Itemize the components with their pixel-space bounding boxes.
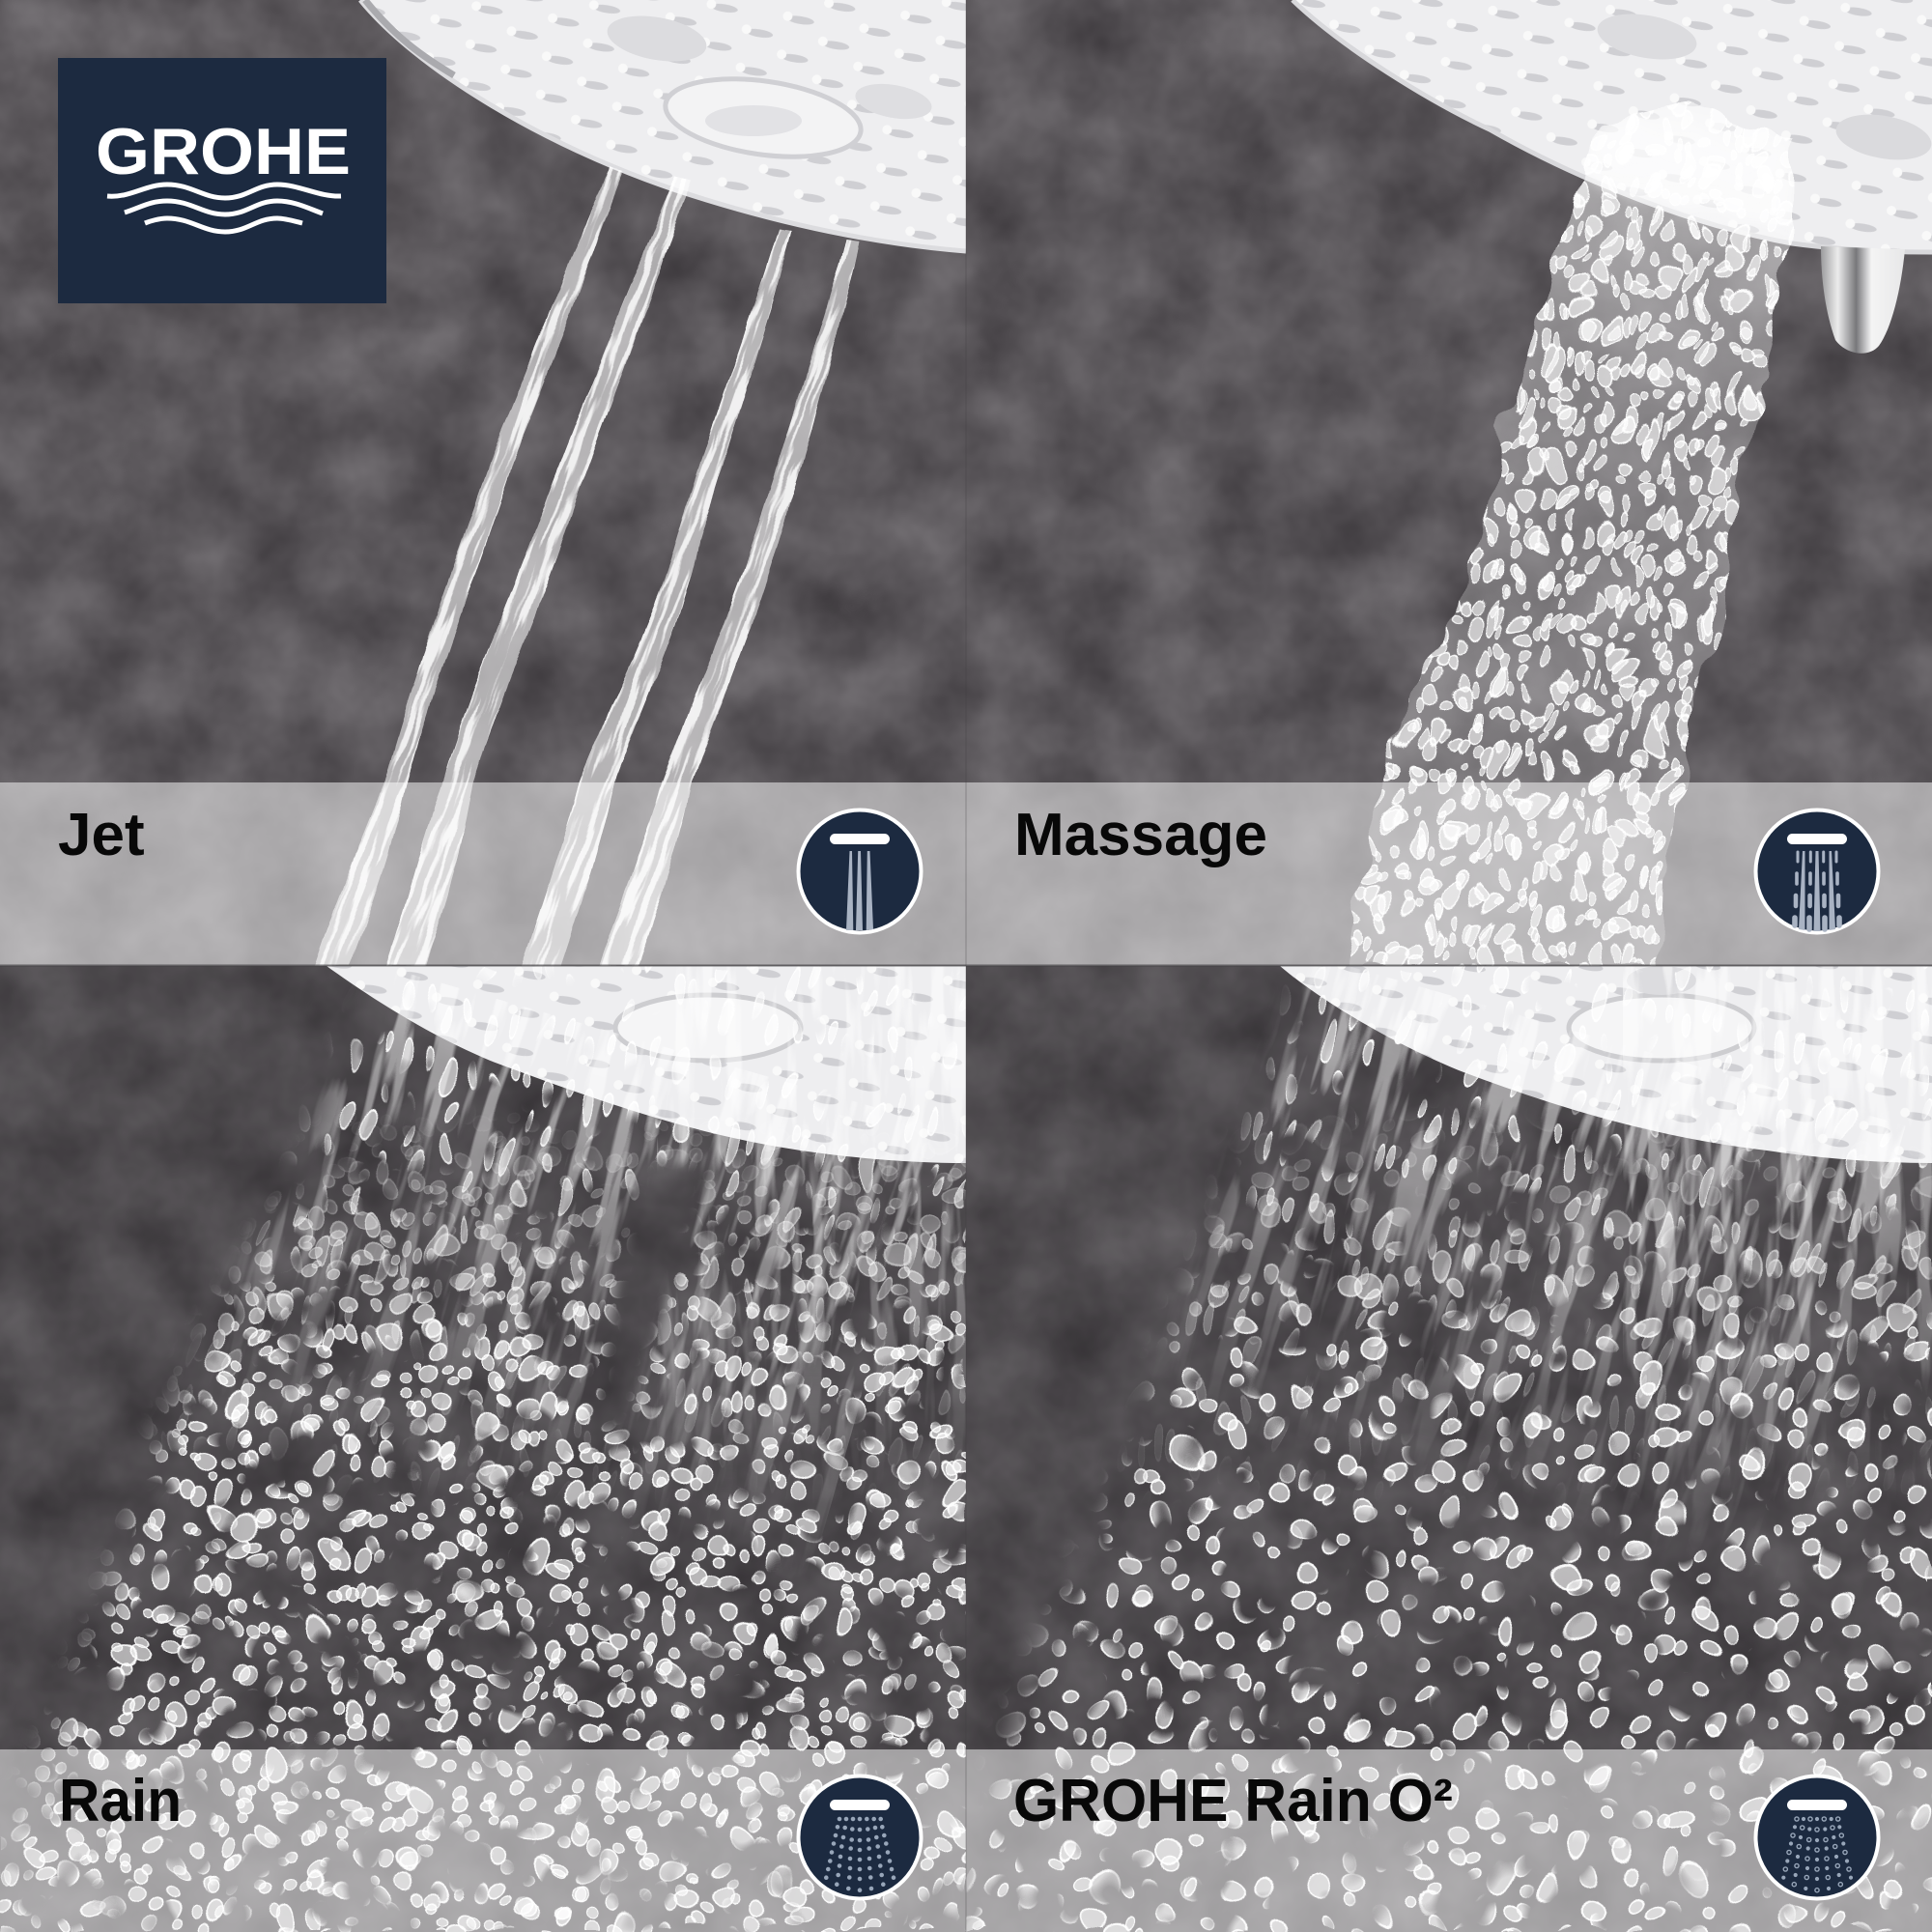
label band: Jet [0,782,966,966]
label band: Rain [0,1749,966,1932]
shower head: Jet [360,0,966,251]
water jets [315,166,860,966]
label band: Rain O2 [966,1749,1932,1932]
shower head: Rain O2 [1280,966,1932,1163]
chrome shower handle [1821,246,1905,354]
logo: GROHE [58,58,386,303]
water droplets: rain [0,902,966,1932]
logo wordmark: GROHE [96,115,351,188]
shower head: Massage [1293,0,1932,252]
water stream: massage [1333,97,1816,966]
panel: Rain spray [0,902,966,1932]
logo waves [107,185,341,232]
label: Jet: Jet [58,802,145,868]
icon: Rain O2 spray [1756,1776,1878,1899]
wall background: Massage [966,0,1932,966]
icon: jet spray [798,810,922,933]
panel: GROHE Rain O2 spray [966,902,1932,1932]
icon: massage spray [1756,810,1878,933]
label band: Massage [966,782,1932,966]
wall background: Rain [0,966,966,1932]
icon: rain spray [798,1776,922,1899]
wall background: Jet [0,0,966,966]
water droplets: Rain O2 [966,902,1932,1932]
label: Massage: Massage [1014,802,1267,868]
shower head: Rain [327,966,966,1163]
label: Rain: Rain [59,1768,182,1834]
panel: Massage spray [966,0,1932,966]
wall background: Rain O2 [966,966,1932,1932]
panel: Jet spray [0,0,966,966]
label: GROHE Rain O2: GROHE Rain O² [1013,1768,1453,1834]
